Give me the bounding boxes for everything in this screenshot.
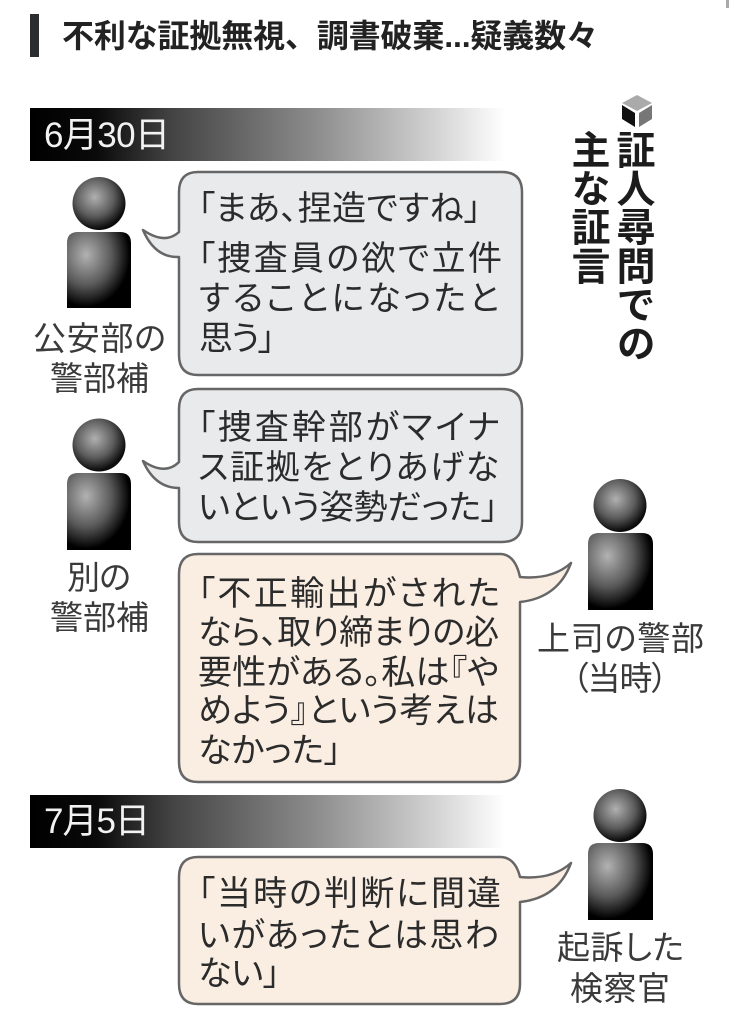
- date band: June 30: 6月30日: [44, 116, 170, 155]
- speech bubble: superior: [179, 554, 571, 782]
- label: prosecutor: [557, 929, 684, 1007]
- heading column: main statements: 主な証言: [566, 130, 609, 285]
- speech bubble: superior: 「不正輸出がされた: [198, 575, 500, 613]
- speech bubble: officer 1: することになったと: [199, 280, 499, 318]
- speech bubble: officer 2: 「捜査幹部がマイナ: [198, 409, 500, 447]
- person icon: superior: [588, 479, 653, 610]
- speech bubble: prosecutor: 「当時の判断に間違: [198, 875, 501, 913]
- label: officer 1: 警部補: [50, 360, 149, 397]
- label: superior: [537, 620, 704, 697]
- speech bubble: superior: 要性がある。私は『や: [198, 654, 499, 692]
- speech bubble: superior: なら、取り締まりの必: [198, 614, 499, 652]
- speech bubble: officer 2: [143, 389, 522, 542]
- speech bubble: superior: なかった」: [198, 732, 341, 770]
- heading column: witness testimony: 証人尋問での: [611, 130, 654, 362]
- label: prosecutor: 起訴した: [557, 929, 684, 966]
- speech bubble: officer 2: ス証拠をとりあげな: [198, 449, 499, 487]
- speech bubble: officer 1: 「まあ、捏造ですね」: [198, 190, 481, 228]
- speech bubble: prosecutor: ない」: [198, 955, 280, 993]
- label: superior: 上司の警部: [537, 620, 704, 657]
- person icon: prosecutor: [588, 789, 653, 920]
- speech bubble: officer 1: 「捜査員の欲で立件: [198, 240, 502, 278]
- speech bubble: prosecutor: [179, 857, 571, 1004]
- date band: July 5: [30, 795, 505, 848]
- label: officer 1: [33, 320, 166, 397]
- person icon: officer 1: [67, 177, 131, 308]
- label: officer 2: 警部補: [50, 599, 149, 636]
- label: officer 1: 公安部の: [33, 320, 166, 357]
- speech bubble: officer 1: 思う」: [199, 320, 275, 358]
- vertical heading: [566, 130, 655, 362]
- label: officer 2: 別の: [67, 559, 131, 596]
- speech bubble: officer 1: [143, 172, 522, 375]
- label: prosecutor: 検察官: [570, 970, 670, 1007]
- title: 不利な証拠無視、調書破棄...疑義数々: [62, 18, 598, 54]
- date band: July 5: 7月5日: [44, 802, 150, 841]
- speech bubble: superior: めよう』という考えは: [198, 692, 499, 730]
- label: superior: （当時）: [572, 660, 668, 697]
- icon: cube: [622, 95, 652, 127]
- speech bubble: prosecutor: いがあったとは思わ: [198, 917, 499, 955]
- speech bubble: officer 2: いという姿勢だった」: [198, 489, 498, 527]
- person icon: officer 2: [67, 418, 131, 550]
- label: officer 2: [50, 559, 149, 636]
- date band: June 30: [30, 108, 505, 161]
